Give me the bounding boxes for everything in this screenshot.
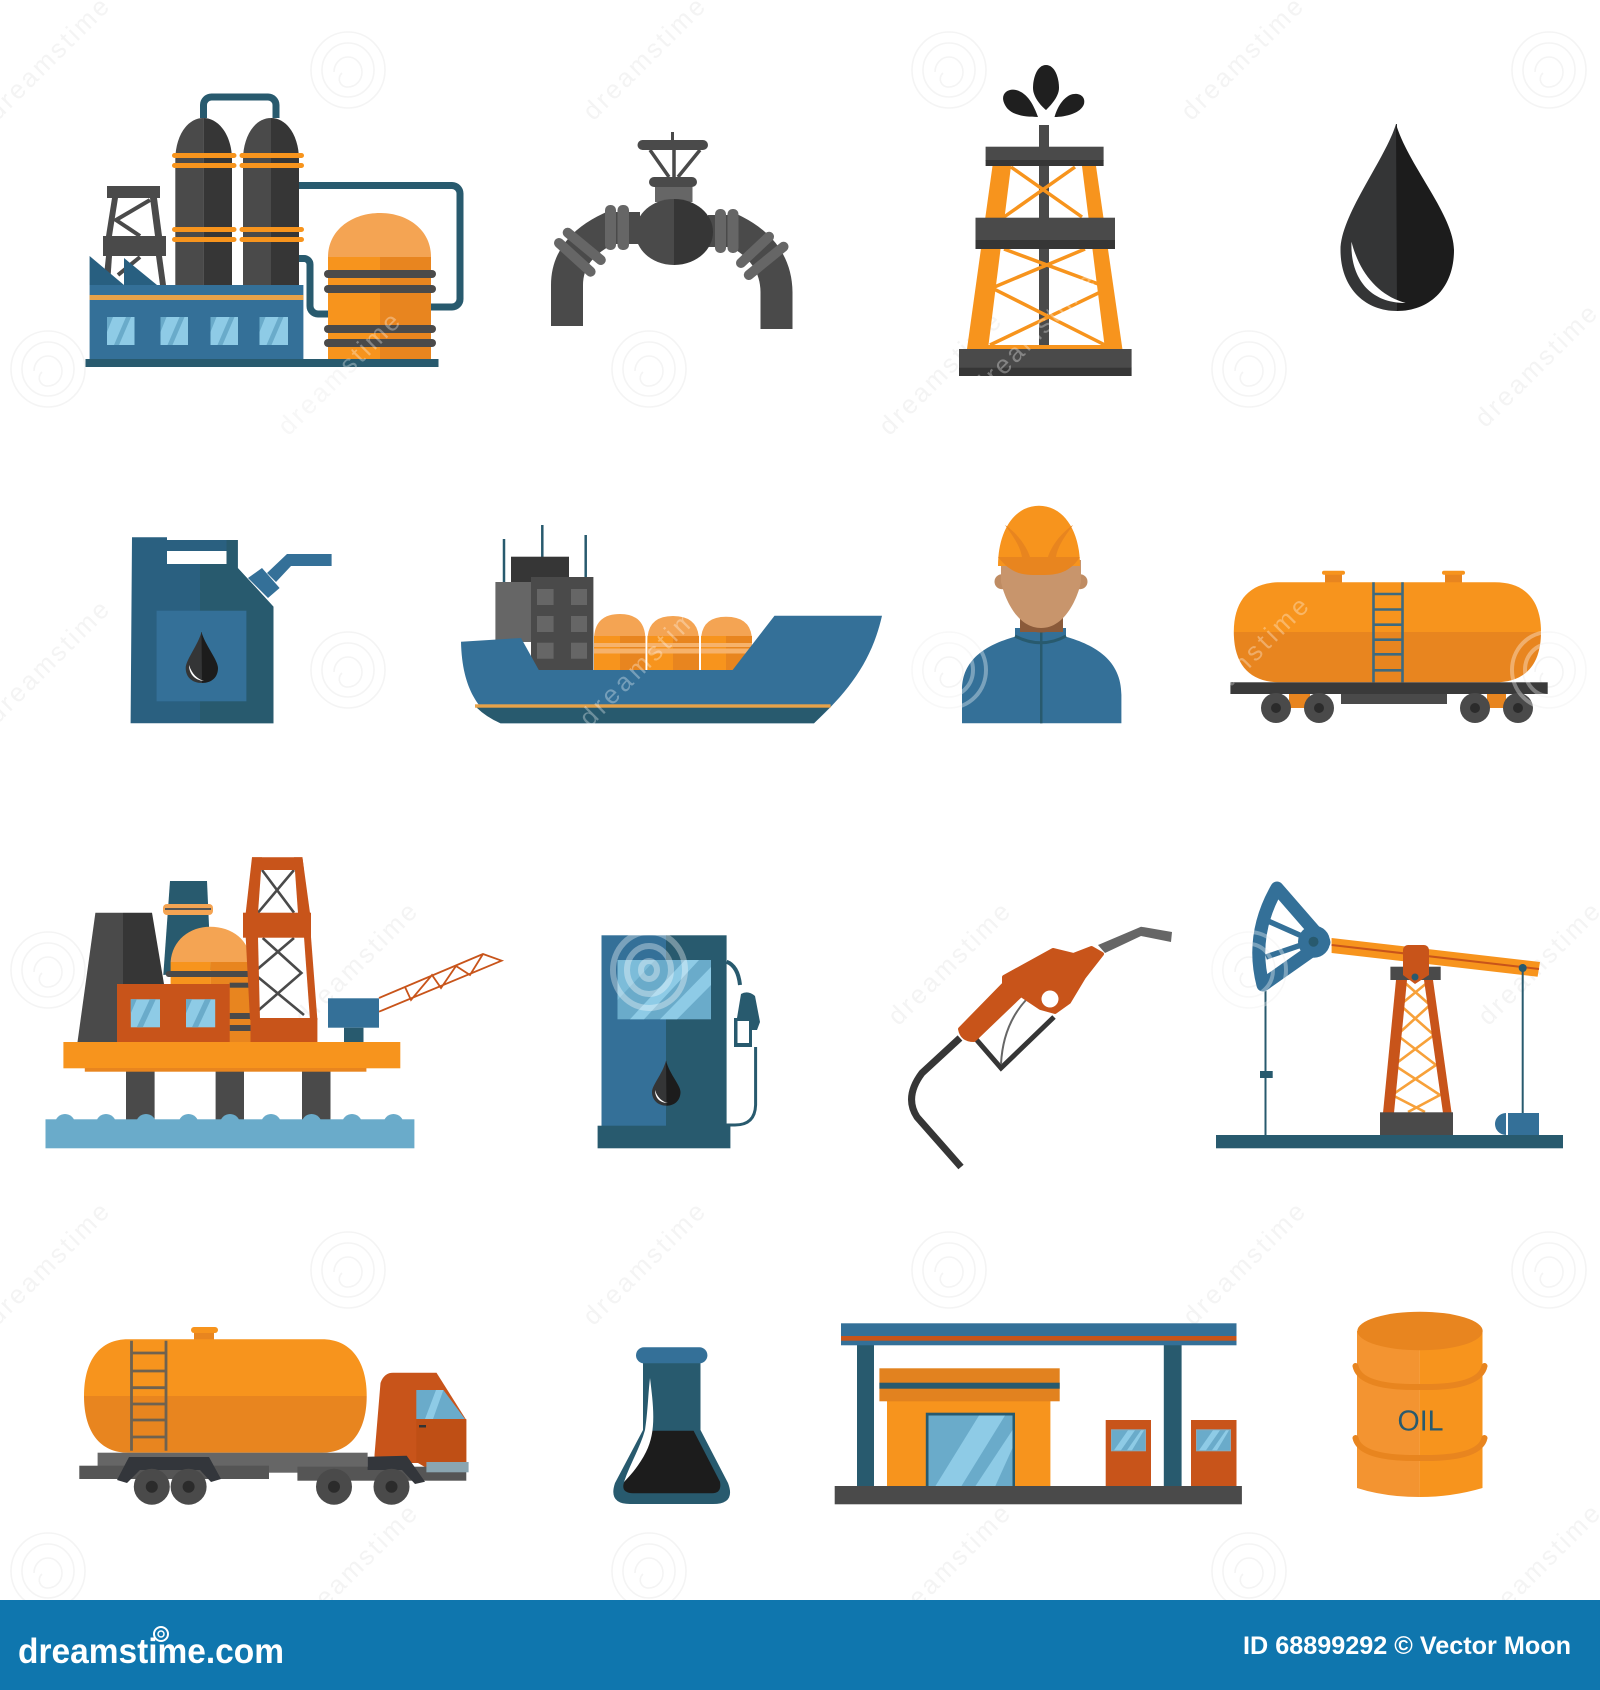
icon: fuel tanker truck — [79, 1327, 469, 1505]
text: dreamstime — [881, 1498, 1016, 1633]
icon: oil derrick with gusher — [959, 65, 1132, 376]
icon: oil drop — [1340, 124, 1454, 311]
icon: oil pumpjack — [1216, 888, 1563, 1148]
icon: jerrycan — [131, 537, 332, 723]
icon: pipeline valve — [559, 132, 784, 329]
icon: offshore oil platform — [46, 857, 502, 1148]
label: OIL: OIL — [1398, 1406, 1444, 1438]
text: dreamstime — [1176, 1196, 1311, 1331]
icon: oil barrel — [1356, 1312, 1484, 1497]
footer logo: dreamstime.com: dreamstime.com — [18, 1632, 284, 1671]
icon: fuel nozzle — [912, 927, 1172, 1167]
watermark marks over the icons: dreamstime — [573, 591, 714, 732]
icon: tanker ship — [461, 525, 882, 723]
footer bar — [0, 1600, 1600, 1690]
icon: oil worker — [962, 506, 1121, 723]
icon: oil refinery — [86, 97, 460, 367]
text: dreamstime — [872, 306, 1007, 441]
icon: laboratory flask — [613, 1347, 730, 1504]
text: dreamstime — [576, 1196, 711, 1331]
watermark marks over the icons: dreamstime — [1173, 591, 1314, 732]
icon: railway tank wagon — [1230, 571, 1548, 723]
text: dreamstime — [288, 1498, 423, 1633]
footer credit: ID 68899292 © Vector Moon — [1243, 1632, 1571, 1660]
icon: gas station — [835, 1323, 1242, 1504]
watermark marks over the icons: dreamstime — [966, 266, 1101, 401]
text: dreamstime — [881, 896, 1016, 1031]
text: dreamstime — [288, 896, 423, 1031]
text: dreamstime — [1468, 298, 1600, 433]
watermark marks over the icons: dreamstime — [271, 306, 406, 441]
icon: fuel dispenser — [598, 935, 760, 1148]
watermark marks over the icons — [271, 266, 1586, 1008]
text: dreamstime — [271, 306, 406, 441]
